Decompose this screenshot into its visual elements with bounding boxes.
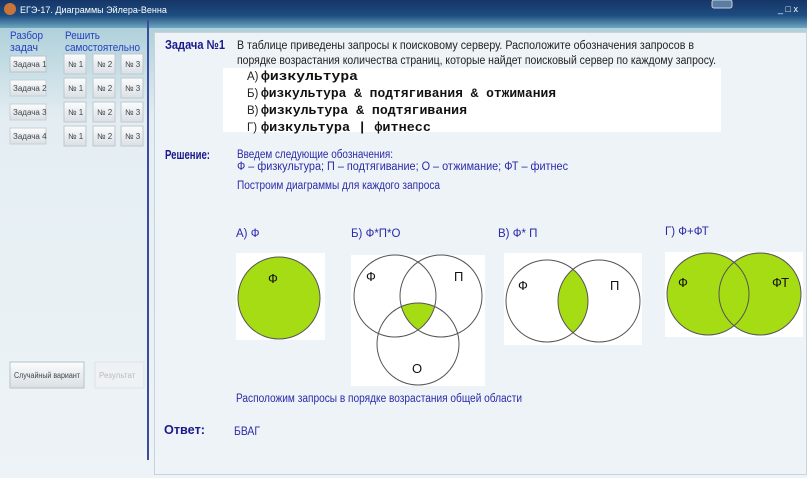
query list <box>223 68 721 135</box>
title bar: ЕГЭ-17. Диаграммы Эйлера-Венна <box>20 5 167 15</box>
heading: solution: Решение: <box>165 147 210 162</box>
query list: Г) <box>247 122 257 134</box>
diagram D: Ф <box>678 275 688 290</box>
left panel: buttons: Результат <box>99 371 136 380</box>
left panel: headings: самостоятельно <box>65 42 140 54</box>
left panel: buttons: № 2 <box>97 108 113 117</box>
left panel: buttons: № 3 <box>125 84 141 93</box>
query list: В) <box>247 105 259 117</box>
diagram B: О <box>412 361 422 376</box>
solution text: Введем следующие обозначения: <box>237 149 393 161</box>
heading: answer: Ответ: <box>164 422 205 437</box>
task text: порядке возрастания количества страниц, которые найдет поисковый сервер по каждому запросу. <box>237 55 716 67</box>
left panel: buttons: Задача 4 <box>13 132 47 141</box>
heading: task: Задача №1 <box>165 37 225 52</box>
query list: физкультура | фитнесс <box>261 120 431 135</box>
diagram A: А) Ф <box>236 228 260 240</box>
left panel: buttons: Задача 3 <box>13 108 47 117</box>
left panel: buttons: № 3 <box>125 60 141 69</box>
diagram B: Ф <box>366 269 376 284</box>
left panel: buttons: Задача 1 <box>13 60 47 69</box>
left panel: headings <box>10 30 140 54</box>
conclusion text: Расположим запросы в порядке возрастания общей области <box>236 393 522 405</box>
query list: А) <box>247 71 259 83</box>
query list: физкультура <box>261 69 358 84</box>
left panel: buttons: Случайный вариант <box>14 371 80 380</box>
left panel: buttons: № 2 <box>97 132 113 141</box>
left panel: buttons <box>10 54 144 388</box>
diagram C: Ф <box>518 278 528 293</box>
diagram D: ФТ <box>772 275 789 290</box>
left panel: buttons: № 1 <box>68 60 84 69</box>
divider line <box>147 20 149 460</box>
left panel: headings: задач <box>10 42 38 54</box>
task text <box>237 40 716 67</box>
diagram B <box>351 228 485 386</box>
query list: физкультура & подтягивания & отжимания <box>261 86 556 101</box>
left panel: buttons: № 3 <box>125 108 141 117</box>
left panel: buttons: № 1 <box>68 132 84 141</box>
diagram C: П <box>610 278 619 293</box>
diagram C <box>498 228 642 345</box>
diagram C: В) Ф* П <box>498 228 537 240</box>
solution text: Построим диаграммы для каждого запроса <box>237 180 441 192</box>
left panel: buttons: № 1 <box>68 108 84 117</box>
diagram A <box>236 228 325 340</box>
left panel: headings: Разбор <box>10 30 43 42</box>
diagram B: П <box>454 269 463 284</box>
left panel: buttons: Задача 2 <box>13 84 47 93</box>
query list: Б) <box>247 88 259 100</box>
task text: В таблице приведены запросы к поисковому серверу. Расположите обозначения запросов в <box>237 40 694 52</box>
left panel: buttons: № 2 <box>97 60 113 69</box>
diagram B: Б) Ф*П*О <box>351 228 401 240</box>
diagram A: Ф <box>268 271 278 286</box>
solution text: Ф – физкультура; П – подтягивание; О – отжимание; ФТ – фитнес <box>237 161 568 173</box>
title bar <box>0 0 807 28</box>
query list: физкультура & подтягивания <box>261 103 467 118</box>
content panel <box>154 32 806 474</box>
diagram D <box>665 226 803 337</box>
answer: БВАГ <box>234 426 261 438</box>
left panel: buttons: № 1 <box>68 84 84 93</box>
diagram D: Г) Ф+ФТ <box>665 226 709 238</box>
left panel: buttons: № 2 <box>97 84 113 93</box>
solution text <box>237 149 568 192</box>
title bar: _ □ x <box>777 4 798 14</box>
left panel: headings: Решить <box>65 30 100 42</box>
left panel: buttons: № 3 <box>125 132 141 141</box>
